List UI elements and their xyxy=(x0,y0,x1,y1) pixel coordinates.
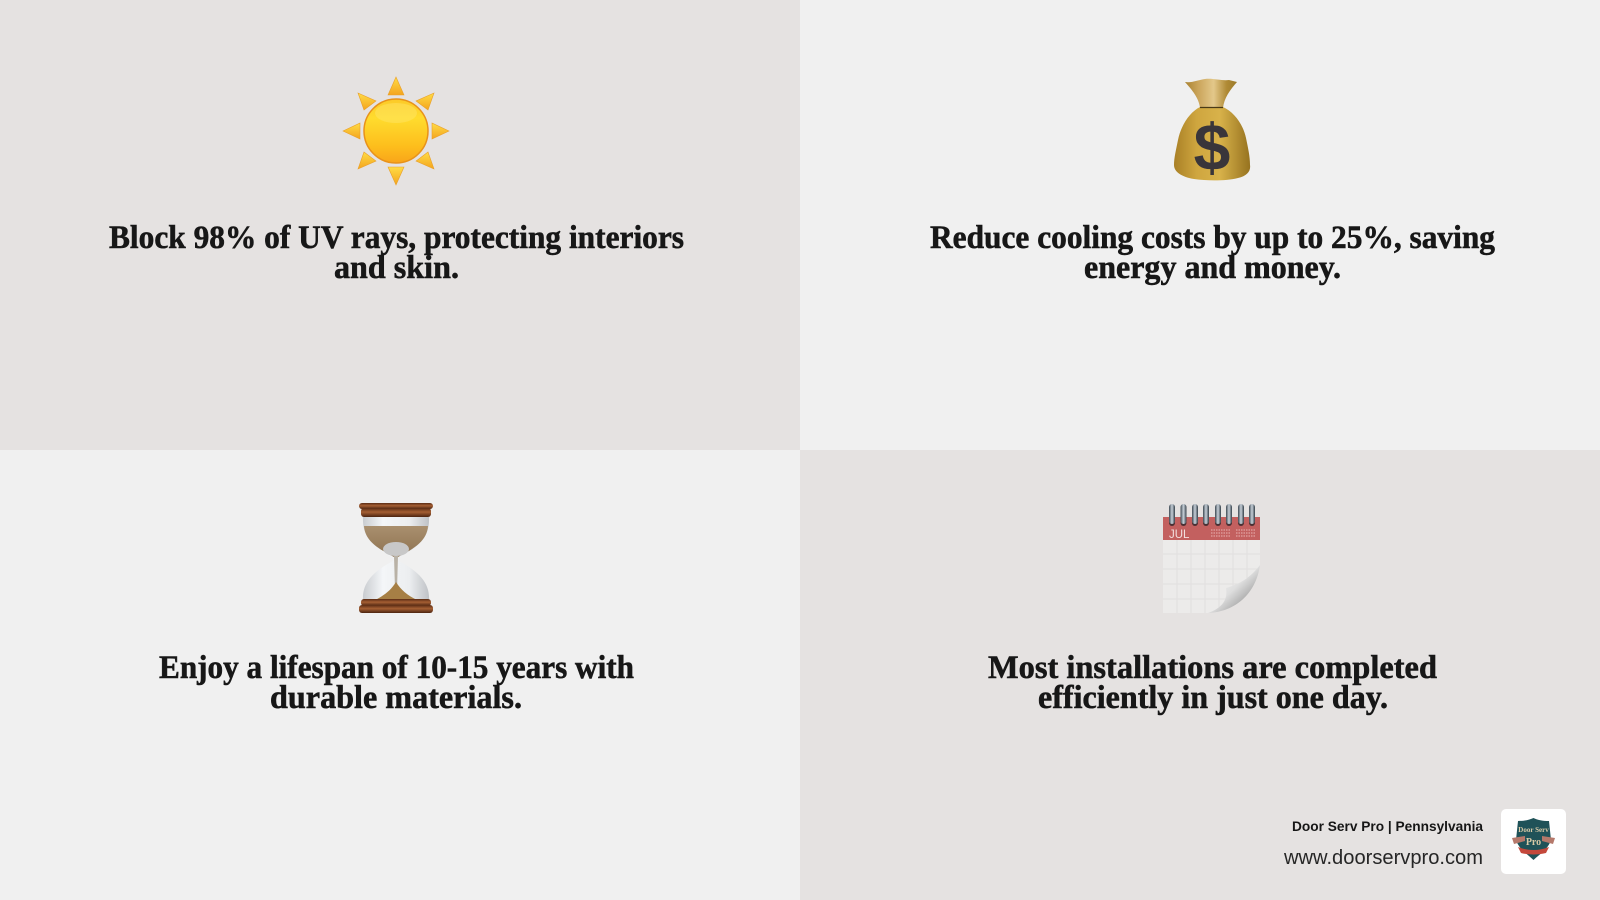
heading: installation time: efficiently in just one day. xyxy=(1038,680,1388,716)
icon glyph: dollar sign: $ xyxy=(1194,110,1230,184)
panel: installation time xyxy=(800,450,1600,900)
heading: lifespan xyxy=(159,650,634,716)
heading: lifespan: durable materials. xyxy=(270,680,522,716)
heading: installation time: Most installations are completed xyxy=(988,650,1437,686)
icon: sun xyxy=(343,77,449,185)
icon: money bag xyxy=(1174,79,1250,184)
heading: cooling savings: Reduce cooling costs by up to 25%, saving xyxy=(930,220,1495,256)
heading: installation time xyxy=(988,650,1437,716)
footer: logo badge xyxy=(1501,809,1566,874)
footer: company name: Door Serv Pro | Pennsylvania xyxy=(1292,818,1483,834)
logo wordmark: Door Serv xyxy=(1518,826,1549,834)
icon: calendar xyxy=(1163,504,1260,613)
panel: lifespan xyxy=(0,450,800,900)
heading: lifespan: Enjoy a lifespan of 10-15 years with xyxy=(159,650,634,686)
heading: UV protection: and skin. xyxy=(334,250,459,286)
heading: cooling savings xyxy=(930,220,1495,286)
heading: cooling savings: energy and money. xyxy=(1084,250,1341,286)
panel: UV protection xyxy=(0,0,800,450)
heading: UV protection xyxy=(109,220,684,286)
calendar month label: JUL xyxy=(1169,529,1190,541)
panel: cooling savings xyxy=(800,0,1600,450)
footer: website: www.doorservpro.com xyxy=(1283,847,1483,869)
logo wordmark: Pro xyxy=(1526,837,1541,848)
icon: hourglass xyxy=(359,503,433,613)
heading: UV protection: Block 98% of UV rays, protecting interiors xyxy=(109,220,684,256)
logo wordmark xyxy=(1518,826,1549,848)
